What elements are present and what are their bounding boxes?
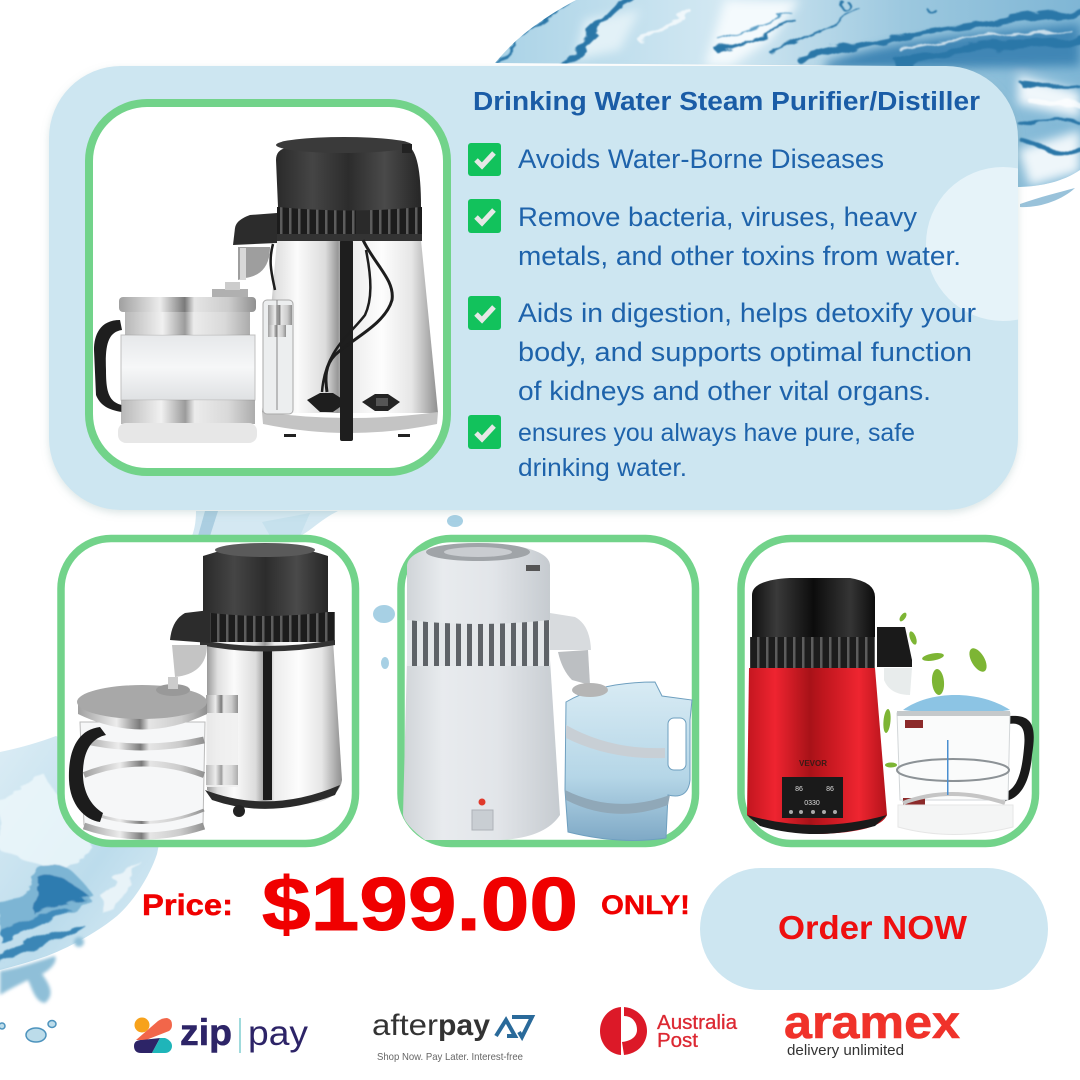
order button: Order NOW [778,909,968,946]
carafe [69,677,207,836]
logo: Australia Post: Post [657,1030,698,1052]
check icon 3 [468,296,501,330]
benefit: pure water: ensures you always have pure, safe [518,419,915,447]
drop cluster [0,937,84,1003]
control display: 0330 [804,800,820,807]
benefit: digestion [518,298,976,406]
benefit: toxins: Remove bacteria, viruses, heavy [518,202,918,232]
price label: Price: [142,889,233,922]
side bottle [206,695,238,787]
logo: afterpay: after [372,1009,438,1042]
main product frame [89,103,447,472]
product card: red distiller [741,538,1036,844]
check icon 4 [468,415,501,449]
decorative light circle [926,167,1018,321]
benefit: toxins: metals, and other toxins from water. [518,241,961,271]
benefit: pure water: drinking water. [518,454,687,482]
logo: afterpay [372,1009,532,1063]
order button [700,868,1048,990]
logo: zip pay: zip [180,1012,232,1053]
red indicator and switch [472,798,493,830]
logo: afterpay: Shop Now. Pay Later. Interest-free [377,1051,523,1063]
product card: chrome distiller [61,538,356,844]
benefit: pure water [518,419,915,482]
bottle [263,300,293,414]
check icon 2 [468,199,501,233]
title: Drinking Water Steam Purifier/Distiller [473,88,980,116]
main distiller [94,137,438,443]
panel: main product description [49,66,1080,510]
control display: 86 [826,786,834,793]
glass jug [897,695,1034,834]
price amount: $199.00 [262,862,578,946]
control display: VEVOR [799,759,827,768]
afterpay arrows icon [496,1017,532,1037]
water splash: behind product row [192,511,338,536]
water droplets [0,515,463,1042]
logo: Australia Post: Australia [657,1012,738,1034]
carafe [94,282,257,443]
water splash: top right [490,0,1080,210]
only label: ONLY! [601,890,690,920]
logo: aramex: delivery unlimited [787,1042,904,1059]
zip icon [134,1018,172,1053]
water splash: bottom left [0,515,463,1042]
product card: white distiller [401,538,696,844]
logo: Australia Post [600,1007,738,1055]
control display [782,759,843,818]
benefit: digestion: Aids in digestion, helps detoxify your [518,298,976,328]
logo: zip pay: pay [248,1014,309,1053]
check icon 1 [468,143,501,176]
blue jug [565,682,692,840]
logo: aramex: aramex [784,996,960,1048]
green leaves [882,611,990,768]
control display: 86 [795,786,803,793]
benefit: diseases: Avoids Water-Borne Diseases [518,144,884,174]
logo: zip pay [134,1012,309,1053]
benefit: digestion: body, and supports optimal function [518,337,972,367]
logo: afterpay: pay [438,1009,490,1042]
benefit: toxins [518,202,961,271]
benefit: digestion: of kidneys and other vital organs. [518,376,931,406]
